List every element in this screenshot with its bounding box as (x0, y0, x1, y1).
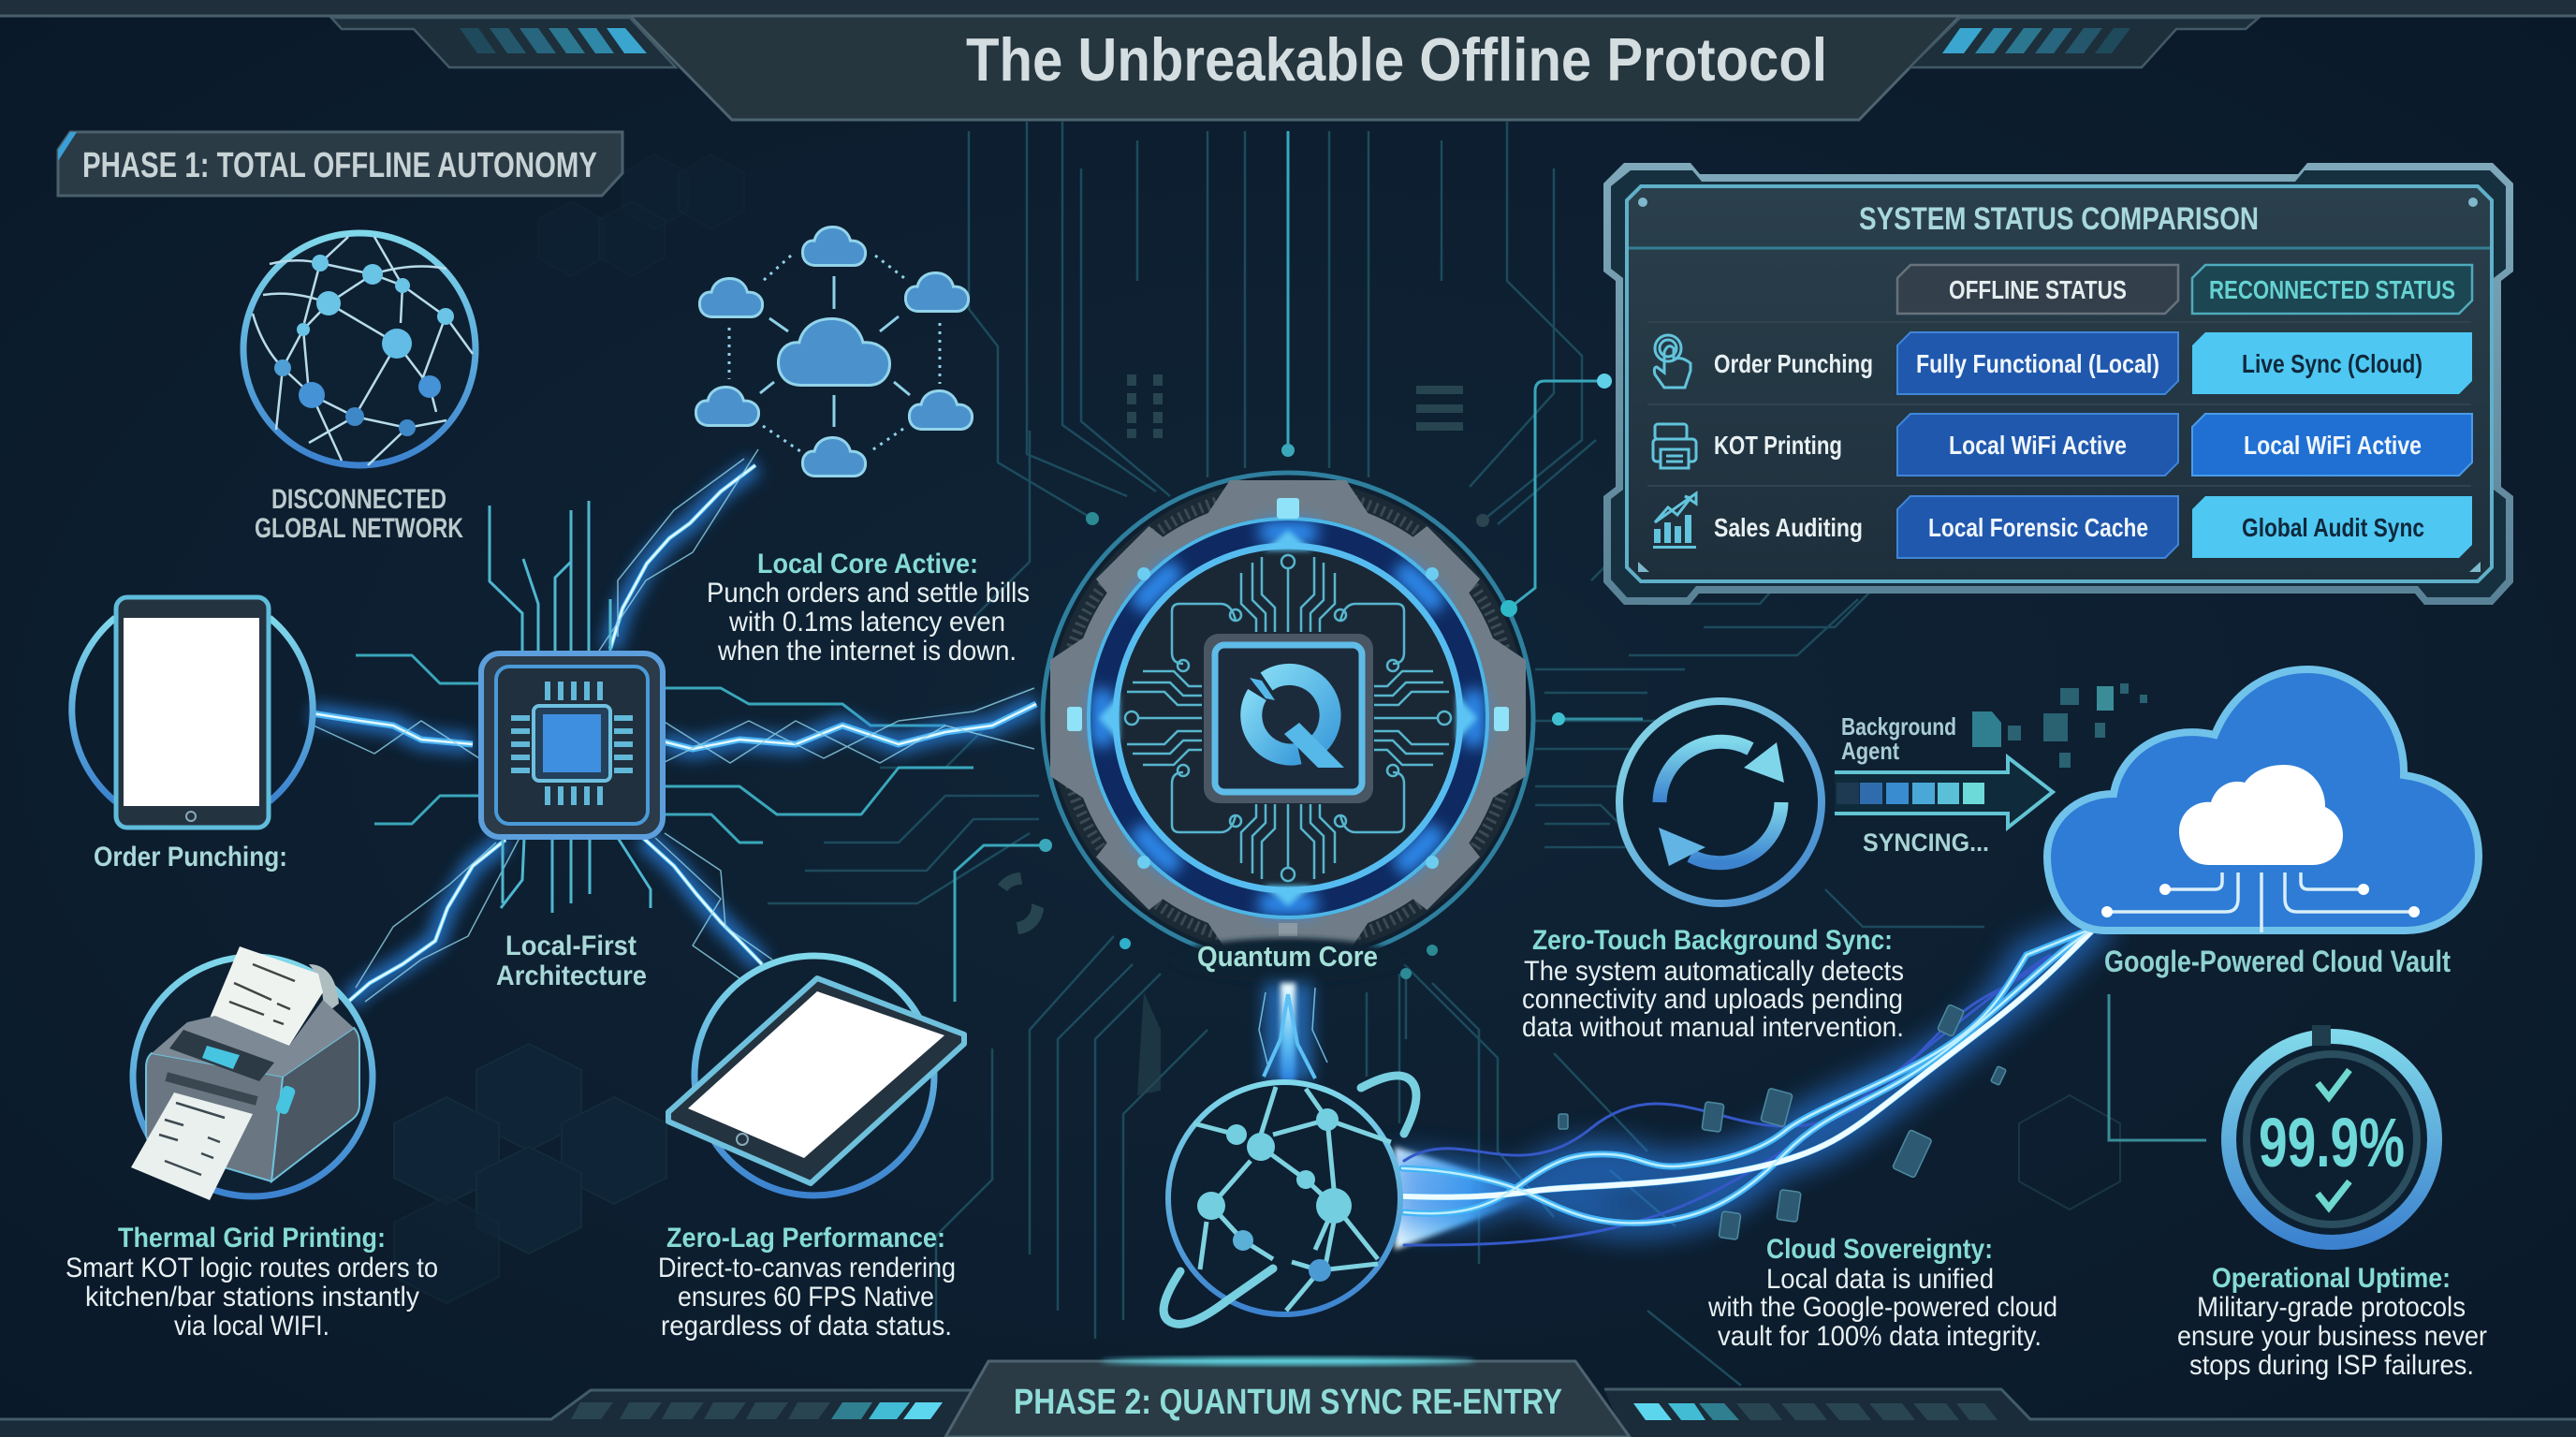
text: operational uptime (2177, 1263, 2487, 1381)
label: background agent: Background (1841, 712, 1956, 740)
text: local core active: Local Core Active: (757, 549, 978, 579)
text: operational uptime: Military-grade protocols (2197, 1292, 2466, 1323)
row: KOT printing: Local WiFi Active (2244, 431, 2422, 460)
icon: Q logo (1250, 674, 1344, 768)
label: disconnected global network: GLOBAL NETWORK (255, 513, 463, 544)
label: local-first architecture (496, 931, 647, 991)
core circuit traces (1125, 555, 1451, 881)
row: order punching: Live Sync (Cloud) (2242, 349, 2422, 378)
label: local-first architecture: Architecture (496, 960, 647, 991)
text: zero-touch background sync: connectivity and uploads pending (1522, 984, 1903, 1015)
text: thermal grid printing: Thermal Grid Printing: (118, 1223, 386, 1254)
text: local core active: with 0.1ms latency even (728, 607, 1005, 638)
core chip (1204, 634, 1373, 803)
connector: core to panel (955, 374, 1643, 1039)
label: disconnected global network (255, 484, 463, 544)
icon: chart (1653, 493, 1696, 549)
label: google-powered cloud vault: Google-Powered Cloud Vault (2104, 945, 2451, 978)
panel: system status comparison (1603, 163, 2513, 605)
flying data chips (1559, 1004, 2006, 1239)
icon: sync circle (1619, 701, 1822, 903)
lightning: globe to cloud vault (1395, 922, 2106, 1250)
text: zero-lag performance: ensures 60 FPS Native (678, 1282, 934, 1312)
background hexagon pattern (394, 154, 2120, 1303)
quantum core hub (1043, 131, 1533, 963)
gauge: 99.9% uptime (2229, 1025, 2435, 1242)
text: zero-touch background sync (1522, 925, 1904, 1043)
row: order punching: Order Punching (1714, 349, 1873, 378)
connector: vault to uptime (2109, 994, 2206, 1140)
left header stripes (460, 28, 647, 53)
lightning: left network (312, 449, 1036, 1002)
icon: reconnected globe (1164, 1076, 1416, 1324)
text: zero-touch background sync: The system automatically detects (1524, 956, 1904, 987)
text: operational uptime: ensure your business never (2177, 1321, 2487, 1352)
label: background agent (1841, 712, 1956, 765)
row: sales auditing: Sales Auditing (1714, 513, 1863, 542)
text: cloud sovereignty: vault for 100% data integrity. (1718, 1321, 2042, 1352)
left footer stripes (571, 1402, 943, 1419)
phase 2 banner (945, 1357, 1630, 1437)
flying data documents (1972, 683, 2147, 768)
label: quantum core: Quantum Core (1197, 940, 1378, 973)
icon: google-powered cloud vault (2047, 669, 2479, 932)
icon: disconnected globe (243, 233, 476, 465)
label: local-first architecture: Local-First (505, 931, 637, 961)
text: thermal grid printing: via local WIFI. (174, 1311, 329, 1342)
panel title: SYSTEM STATUS COMPARISON (1859, 201, 2259, 237)
lightning: core to globe (1259, 983, 1327, 1081)
text: zero-touch background sync: Zero-Touch Background Sync: (1532, 925, 1893, 956)
row: sales auditing: Local Forensic Cache (1928, 513, 2148, 542)
icon: local-first chip (481, 501, 663, 913)
column header: offline status (1897, 265, 2178, 314)
small grid of decorative bars (998, 374, 1463, 1095)
text: cloud sovereignty: Cloud Sovereignty: (1766, 1234, 1993, 1265)
text: local core active: when the internet is down. (717, 636, 1017, 667)
icon: tablet order punching (72, 597, 313, 828)
footer frame (0, 1389, 2576, 1437)
text: zero-lag performance: Zero-Lag Performance: (666, 1223, 945, 1254)
icon: touch hand (1654, 335, 1690, 388)
right footer stripes (1633, 1403, 1998, 1420)
text: thermal grid printing: kitchen/bar stations instantly (85, 1282, 419, 1312)
icon: cloud network (695, 227, 973, 477)
text: thermal grid printing (66, 1223, 438, 1342)
row: order punching (1654, 332, 2472, 394)
label mask under quantum core (1171, 938, 1405, 983)
phase 2 banner: PHASE 2: QUANTUM SYNC RE-ENTRY (1014, 1383, 1562, 1422)
icon: tablet zero-lag (668, 956, 964, 1195)
gauge: 99.9% uptime: 99.9% (2259, 1104, 2405, 1181)
column header: reconnected status (2192, 265, 2472, 314)
text: cloud sovereignty: Local data is unified (1766, 1264, 1994, 1295)
phase 1 label: PHASE 1: TOTAL OFFLINE AUTONOMY (82, 146, 597, 185)
right header stripes (1942, 28, 2130, 53)
row: sales auditing: Global Audit Sync (2242, 513, 2424, 542)
text: zero-lag performance: regardless of data status. (661, 1311, 952, 1342)
text: local core active (707, 549, 1030, 667)
column header: offline status: OFFLINE STATUS (1949, 275, 2127, 304)
icon: printer (1653, 424, 1696, 468)
title: The Unbreakable Offline Protocol (966, 25, 1827, 94)
text: operational uptime: Operational Uptime: (2212, 1263, 2451, 1294)
text: zero-touch background sync: data without manual intervention. (1522, 1012, 1904, 1043)
label: syncing: SYNCING... (1863, 828, 1989, 857)
row: KOT printing: Local WiFi Active (1949, 431, 2127, 460)
row: sales auditing (1653, 493, 2472, 558)
text: cloud sovereignty: with the Google-powered cloud (1707, 1292, 2057, 1323)
row: KOT printing: KOT Printing (1714, 431, 1842, 460)
text: thermal grid printing: Smart KOT logic routes orders to (66, 1253, 438, 1283)
background circuit traces (768, 122, 2109, 1386)
text: zero-lag performance: Direct-to-canvas rendering (658, 1253, 956, 1283)
text: local core active: Punch orders and settle bills (707, 578, 1030, 609)
column header: reconnected status: RECONNECTED STATUS (2209, 275, 2455, 304)
label: background agent: Agent (1841, 737, 1899, 765)
header frame (0, 0, 2576, 120)
row: KOT printing (1653, 414, 2472, 476)
text: zero-lag performance (658, 1223, 956, 1342)
phase 1 label (58, 132, 622, 196)
arrow: syncing (1835, 757, 2053, 828)
label: order punching: Order Punching: (94, 842, 287, 872)
icon: thermal printer (131, 946, 373, 1200)
label: disconnected global network: DISCONNECTED (271, 484, 446, 515)
text: cloud sovereignty (1707, 1234, 2057, 1352)
text: operational uptime: stops during ISP failures. (2189, 1350, 2474, 1381)
row: order punching: Fully Functional (Local) (1916, 349, 2159, 378)
